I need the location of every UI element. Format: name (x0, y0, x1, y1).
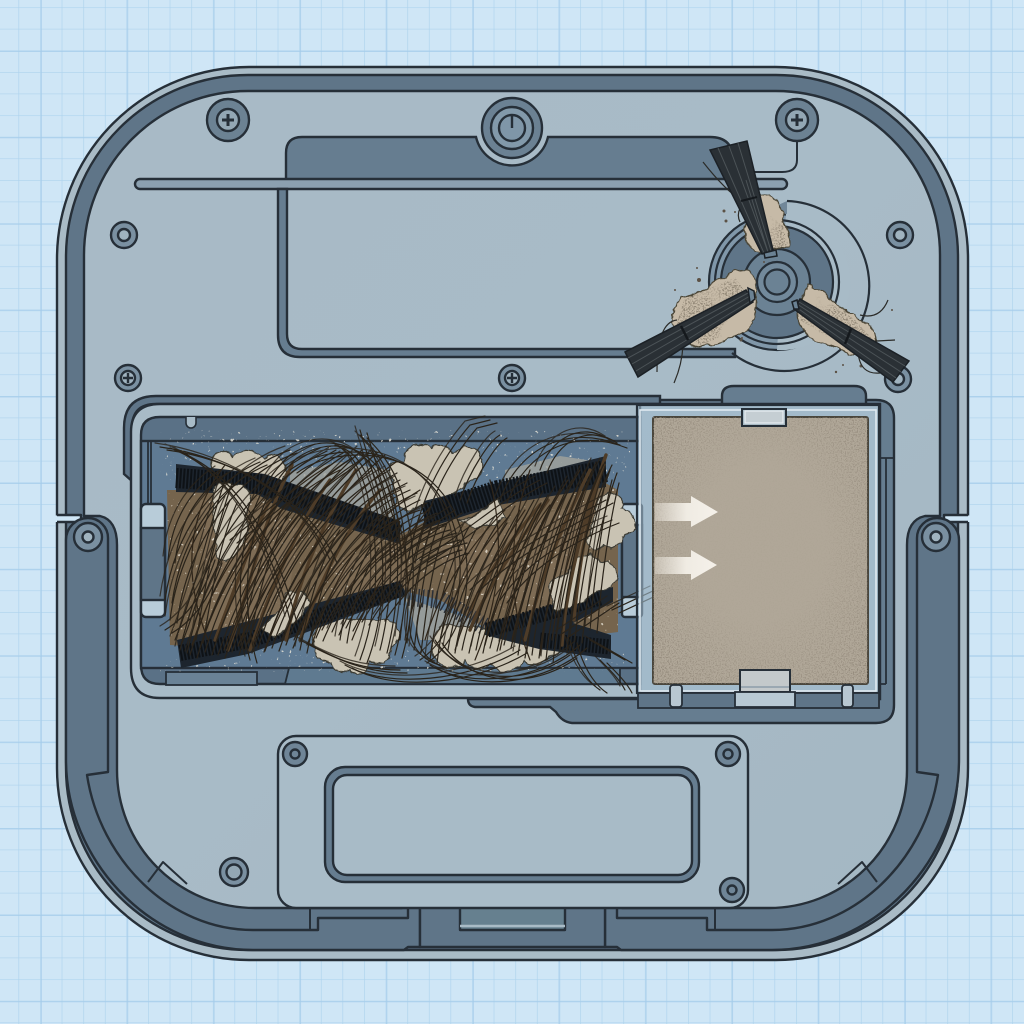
airflow arrow upper (655, 496, 718, 527)
screw upper left (111, 222, 137, 248)
recess inner (333, 775, 692, 875)
airflow arrow lower (655, 550, 717, 580)
dark slot (286, 137, 733, 180)
roller core (167, 480, 618, 650)
screw top left (207, 99, 249, 141)
side brush assembly (625, 141, 911, 392)
dust specks (674, 210, 893, 373)
roller compartment (124, 396, 660, 698)
recess (325, 767, 699, 882)
bin frame (637, 405, 879, 693)
bristle band top left (176, 464, 400, 544)
extra hair layer (192, 450, 600, 660)
dense edge grain (653, 417, 868, 684)
bristle comb centre (400, 596, 484, 626)
panel plate (278, 736, 748, 908)
filter surround housing (468, 386, 894, 723)
top tab (722, 386, 866, 404)
floor trapezoid (285, 668, 620, 684)
roller brush with debris (155, 416, 662, 693)
floor left box (166, 672, 257, 685)
bottom clip (740, 670, 790, 692)
screw mid centre (499, 365, 525, 391)
side notches (55, 516, 970, 522)
rail (135, 179, 787, 189)
stray hairs (657, 162, 895, 383)
right roller cap (622, 504, 642, 617)
right rail stripes (880, 458, 894, 684)
compartment outer frame (124, 396, 660, 481)
offset hair copy (167, 423, 662, 693)
roller grit (167, 480, 618, 650)
cavity rails (141, 441, 640, 668)
compartment plate (131, 404, 660, 698)
lower bin strip (638, 685, 879, 708)
bristle band bottom left (177, 581, 407, 668)
small notch (186, 417, 196, 428)
lobe screw left (74, 523, 102, 551)
lower access panel (278, 736, 748, 908)
hair strands fine (160, 420, 655, 690)
left bumper lobe (66, 518, 420, 950)
screw lower left (220, 858, 248, 886)
grain on clumps (676, 201, 875, 352)
dark bumper band (66, 75, 958, 950)
screw upper right (887, 222, 913, 248)
dust clouds front (214, 483, 635, 638)
hub rings (709, 201, 869, 371)
robot body (55, 67, 970, 960)
dust clouds behind (211, 444, 561, 673)
screw top right (776, 99, 818, 141)
pale dust behind hair (290, 456, 600, 640)
clear dust bin (637, 405, 894, 708)
bristle tuft right (792, 299, 909, 382)
centre latch (402, 893, 622, 947)
left roller cap (141, 504, 165, 617)
top clip (742, 409, 786, 426)
right surround band (468, 400, 894, 723)
bin inner highlight (640, 410, 876, 691)
cavity box (141, 417, 640, 684)
panel screws (283, 742, 744, 902)
bristle tuft top (710, 141, 777, 258)
main plate (84, 91, 940, 908)
cavity floor (141, 441, 640, 668)
screws (74, 99, 950, 886)
airborne dust (160, 430, 630, 672)
second offset hair copy (155, 416, 650, 686)
top power button (482, 98, 542, 158)
top tab and handle slot (135, 137, 797, 357)
hair strands thick (215, 455, 606, 650)
window outline (278, 189, 735, 357)
notch lines (57, 515, 968, 522)
outer rim (57, 67, 968, 960)
lower right screw (885, 366, 911, 392)
bristle tuft left (625, 288, 755, 377)
bristle band top right (424, 456, 606, 529)
dust filter mat (653, 417, 868, 684)
right bumper lobe (605, 518, 959, 950)
bristle band bottom right (485, 587, 613, 659)
dust clumps (673, 195, 877, 354)
roller mottling (200, 500, 600, 640)
screw mid left (115, 365, 141, 391)
bumper segment details (148, 862, 877, 931)
wire (733, 140, 797, 172)
lobe screw right (922, 523, 950, 551)
